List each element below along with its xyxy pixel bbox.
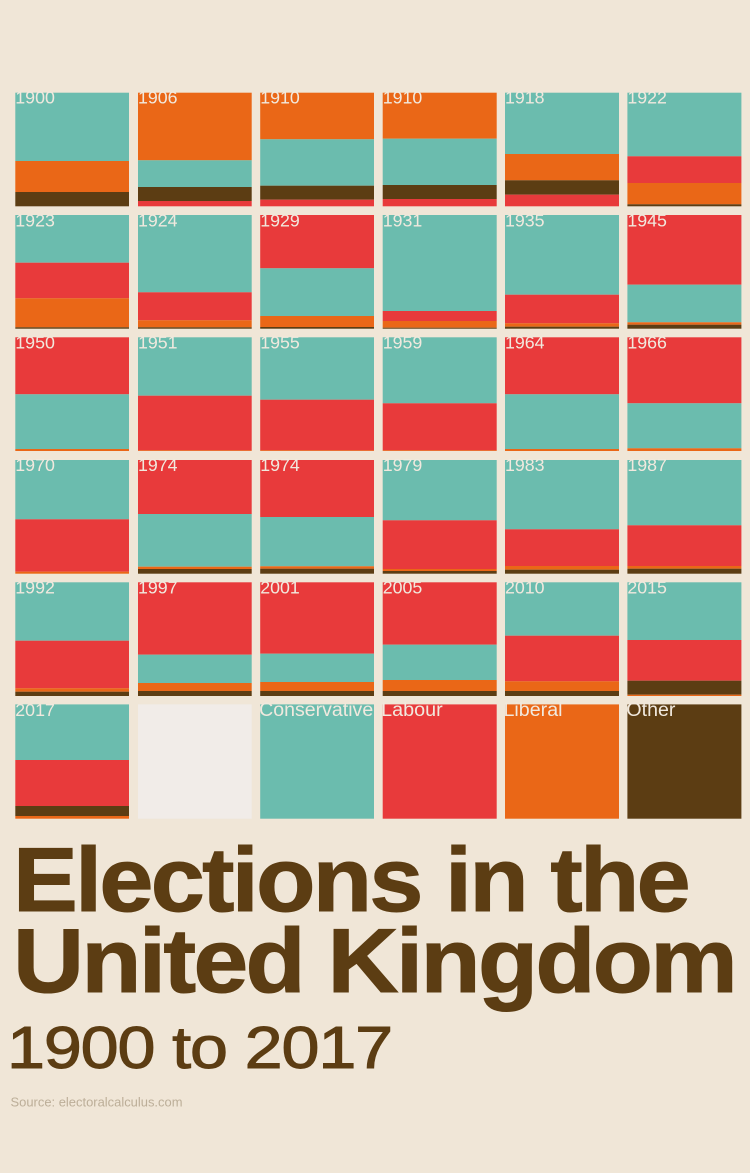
cell: 2001: 2001 xyxy=(260,577,300,597)
cell: 1955 xyxy=(260,332,374,451)
subtitle: 1900 to 2017 xyxy=(7,1015,392,1081)
cell: 1900 xyxy=(15,87,129,206)
source note: Source: electoralcalculus.com xyxy=(10,1094,182,1110)
cell: 1974 October: 1974 xyxy=(260,455,300,475)
cell: 1924: 1924 xyxy=(138,211,178,231)
cell: 1992 xyxy=(15,577,129,696)
cell: 1983 xyxy=(505,455,619,574)
cell: 1922: 1922 xyxy=(627,87,667,107)
cell: 1966 xyxy=(627,332,741,451)
cell: 1945: 1945 xyxy=(627,211,667,231)
cell: 1918: 1918 xyxy=(505,87,545,107)
cell: 1997 xyxy=(138,577,252,696)
cell: 2005: 2005 xyxy=(383,577,422,597)
cell: 1935 xyxy=(505,211,619,329)
cell: 1923 xyxy=(15,211,129,329)
cell: 1970: 1970 xyxy=(15,455,55,475)
cell: 2005 xyxy=(383,577,497,696)
cell: 2010: 2010 xyxy=(505,577,545,597)
cell: 1951: 1951 xyxy=(138,332,178,352)
legend: Conservative: Conservative xyxy=(259,700,373,721)
title xyxy=(13,830,735,1012)
cell: 1918 xyxy=(505,87,619,206)
legend: Liberal xyxy=(504,700,619,819)
cell: 1923: 1923 xyxy=(15,211,55,231)
cell: 2010 xyxy=(505,577,619,696)
cell: 1966: 1966 xyxy=(627,332,667,352)
cell: 1979: 1979 xyxy=(383,455,422,475)
legend: Liberal: Liberal xyxy=(504,700,562,721)
cell: 1906: 1906 xyxy=(138,87,178,107)
title: Elections in the xyxy=(13,830,688,931)
cell: 1997: 1997 xyxy=(138,577,178,597)
cell: 2017: 2017 xyxy=(15,700,55,720)
title: United Kingdom xyxy=(13,911,735,1012)
cell: 1910 second election: 1910 xyxy=(383,87,422,107)
cell: 1924 xyxy=(138,211,252,329)
cell: 1974 February: 1974 xyxy=(138,455,178,475)
cell: 2015: 2015 xyxy=(627,577,667,597)
legend: Other: Other xyxy=(626,700,676,721)
cell: 1935: 1935 xyxy=(505,211,545,231)
cell: 1964: 1964 xyxy=(505,332,545,352)
cell: 1970 xyxy=(15,455,129,574)
cell: 1910 second election xyxy=(383,87,497,206)
panel: election grid xyxy=(15,87,741,819)
cell: 2017 xyxy=(15,700,129,819)
cell: 1950 xyxy=(15,332,129,451)
cell: 1910: 1910 xyxy=(260,87,300,107)
cell: 1964 xyxy=(505,332,619,451)
cell: 1987: 1987 xyxy=(627,455,667,475)
cell: 1992: 1992 xyxy=(15,577,55,597)
empty cell xyxy=(138,704,252,819)
legend: Other xyxy=(626,700,741,819)
cell: 1906 xyxy=(138,87,252,206)
cell: 1929 xyxy=(260,211,374,329)
cell: 1910 xyxy=(260,87,374,206)
cell: 1959: 1959 xyxy=(383,332,422,352)
cell: 1959 xyxy=(383,332,497,451)
cell: 1931 xyxy=(383,211,497,329)
cell: 2001 xyxy=(260,577,374,696)
legend: Conservative xyxy=(259,700,374,819)
cell: 1922 xyxy=(627,87,741,206)
cell: 1979 xyxy=(383,455,497,574)
cell: 1987 xyxy=(627,455,741,574)
cell: 1951 xyxy=(138,332,252,451)
legend: Labour xyxy=(381,700,497,819)
cell: 1900: 1900 xyxy=(15,87,55,107)
cell: 1955: 1955 xyxy=(260,332,300,352)
cell: 1929: 1929 xyxy=(260,211,300,231)
cell: 1945 xyxy=(627,211,741,329)
cell: 1983: 1983 xyxy=(505,455,545,475)
legend: Labour: Labour xyxy=(381,700,443,721)
cell: 1974 February xyxy=(138,455,252,574)
cell: 1950: 1950 xyxy=(15,332,55,352)
cell: 1974 October xyxy=(260,455,374,574)
cell: 1931: 1931 xyxy=(383,211,422,231)
cell: 2015 xyxy=(627,577,741,696)
